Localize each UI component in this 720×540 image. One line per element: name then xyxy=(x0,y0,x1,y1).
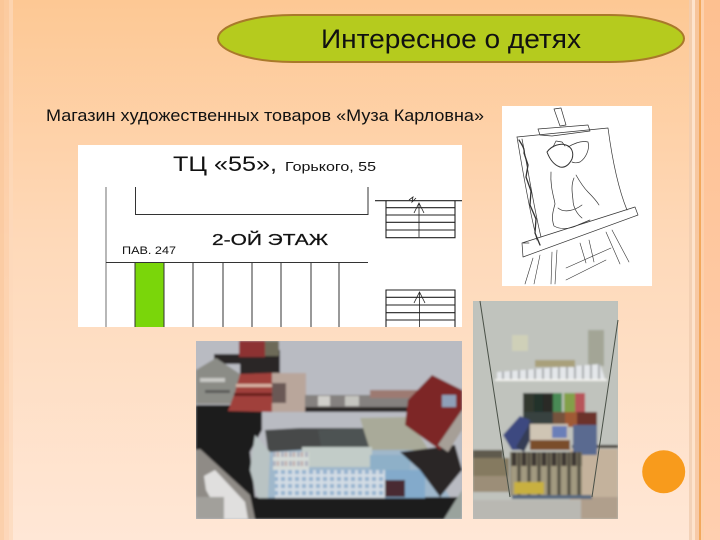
photo: store counter xyxy=(196,341,462,519)
floor plan lines xyxy=(106,187,368,327)
map heading: Горького, 55 xyxy=(285,160,376,174)
floor label: 2-ОЙ ЭТАЖ xyxy=(212,231,329,249)
lower staircase xyxy=(386,290,455,327)
title banner: Интересное о детях xyxy=(321,24,582,54)
map heading: ТЦ «55», xyxy=(173,153,277,176)
decorative orange circle xyxy=(642,450,685,493)
highlighted pavilion xyxy=(135,262,164,327)
subtitle: Магазин художественных товаров «Муза Карловна» xyxy=(46,106,484,125)
title banner xyxy=(218,15,684,62)
photo: paint display case xyxy=(473,301,618,519)
map heading xyxy=(173,153,376,176)
easel drawing xyxy=(502,106,652,286)
store location map xyxy=(78,145,462,327)
pavilion label: ПАВ. 247 xyxy=(122,245,176,257)
upper staircase xyxy=(375,197,462,238)
